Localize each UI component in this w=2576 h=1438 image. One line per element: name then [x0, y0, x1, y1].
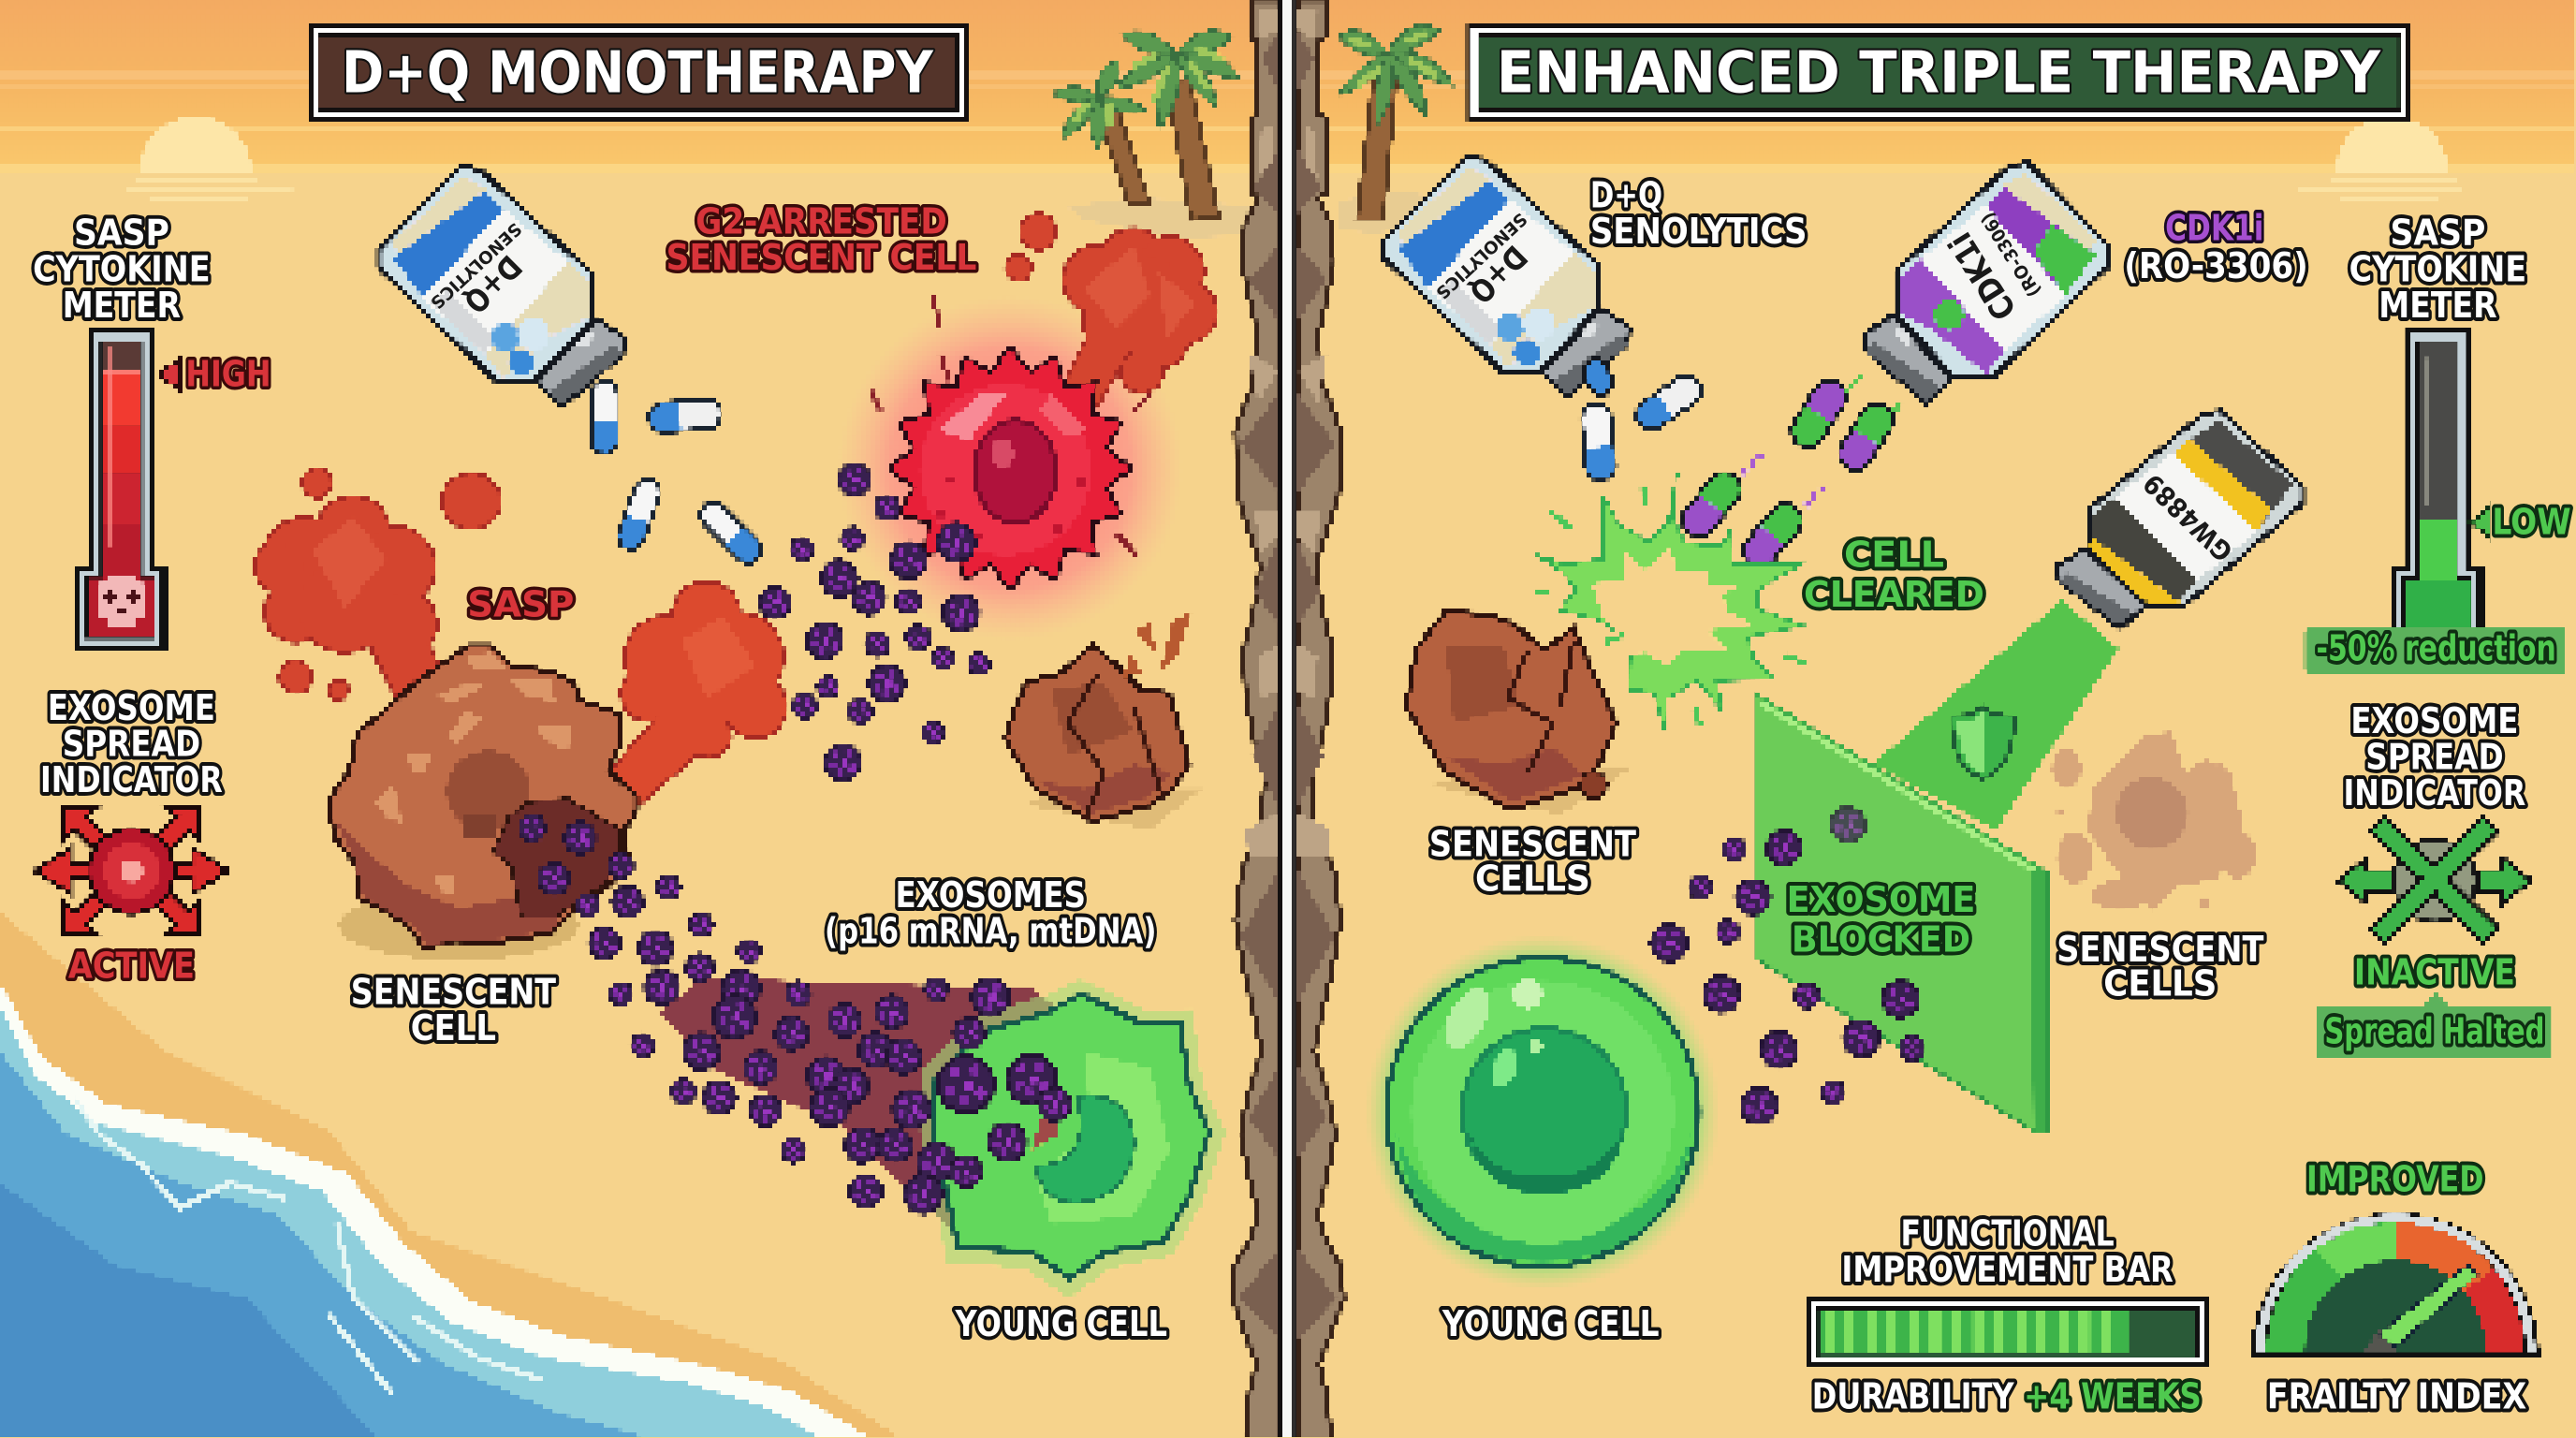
pills left [592, 381, 767, 568]
smoke right of cell [611, 583, 785, 808]
senescent cell rock [329, 646, 637, 961]
label: SASP cytokine meter left: SASP [74, 213, 169, 255]
label: exosome spread indicator left: EXOSOME [48, 687, 215, 729]
label: young cell left: YOUNG CELL [955, 1303, 1167, 1345]
CDK1i pills [1676, 374, 1902, 574]
label: exosome blocked: BLOCKED [1792, 918, 1970, 961]
label: G2-arrested senescent cell [666, 200, 976, 279]
sun left [128, 117, 292, 202]
label: durability [1812, 1375, 2202, 1417]
exosomes inside cell [518, 814, 597, 896]
bottle label CDK1i: (RO-3306) [1976, 209, 2045, 301]
label: exosome spread indicator left: INDICATOR [40, 759, 223, 801]
smoke top right [1005, 213, 1216, 431]
label: G2-arrested senescent cell: G2-ARRESTED [695, 200, 947, 242]
bottle label CDK1i: CDK1i [1941, 226, 2025, 327]
label: HIGH: HIGH [185, 354, 271, 396]
centre divider line [1278, 0, 1297, 1438]
SASP thermometer left [76, 329, 166, 649]
label: SASP: SASP [467, 583, 574, 625]
label: SASP cytokine meter left: METER [63, 285, 181, 327]
label: exosome spread indicator right: SPREAD [2365, 737, 2504, 779]
label: cell cleared: CELL [1844, 535, 1944, 577]
label: D+Q senolytics [1590, 174, 1807, 253]
label: senescent cells under rock: CELLS [1475, 858, 1590, 900]
label: SASP cytokine meter left: CYTOKINE [33, 248, 211, 290]
label: exosomes: EXOSOMES [895, 874, 1086, 917]
label: CDK1i [2124, 207, 2308, 287]
palm tree right [1339, 24, 1452, 233]
D+Q bottle right [1384, 155, 1630, 399]
label: ACTIVE: ACTIVE [68, 945, 195, 987]
label: exosome blocked [1787, 879, 1975, 961]
pills right blue [1580, 370, 1707, 481]
label: senescent cells under rock: SENESCENT [1429, 824, 1637, 866]
exosome blocking shield wall [1754, 694, 2047, 1132]
bottle label left: D+Q [457, 248, 529, 320]
red G2-arrested senescent cell [871, 296, 1149, 590]
icon: shield [1952, 707, 2014, 779]
heading: Enhanced Triple Therapy: ENHANCED TRIPLE THERAPY [1497, 40, 2381, 107]
label: exosomes: (p16 mRNA, mtDNA) [825, 911, 1157, 953]
label: exosome spread indicator right [2344, 700, 2525, 814]
label: SASP cytokine meter right [2349, 213, 2526, 327]
label: CDK1i: CDK1i [2165, 207, 2263, 249]
label: SASP cytokine meter right: SASP [2391, 213, 2485, 255]
exosome swarm [575, 852, 1073, 1215]
sky with sunset bands [0, 0, 2576, 172]
label: senescent cell [351, 972, 557, 1049]
functional improvement bar [1806, 1297, 2209, 1369]
label: cell cleared [1804, 535, 1984, 616]
label: exosome spread indicator left [40, 687, 223, 801]
label: functional improvement bar [1841, 1213, 2174, 1291]
label: frailty index: FRAILTY INDEX [2267, 1375, 2526, 1417]
frailty gauge [2250, 1212, 2539, 1358]
label: INACTIVE: INACTIVE [2354, 951, 2515, 993]
label: senescent cell: SENESCENT [351, 972, 557, 1014]
exosome indicator inactive icon [2337, 816, 2531, 943]
sun right [2296, 117, 2461, 202]
fractured rock right [1406, 611, 1630, 814]
young healthy cell [1365, 935, 1720, 1290]
label: functional improvement bar: IMPROVEMENT BAR [1841, 1249, 2174, 1291]
label: SASP cytokine meter right: METER [2378, 285, 2497, 327]
bottle label right D+Q: SENOLYTICS [1431, 209, 1530, 302]
young cell infected [920, 979, 1225, 1298]
icon: skull [98, 576, 144, 627]
title panel left [307, 23, 968, 122]
label: G2-arrested senescent cell: SENESCENT CELL [666, 237, 976, 279]
GW4889 bottle [2057, 411, 2303, 628]
spread halted badge [2317, 992, 2553, 1056]
red G2-arrested senescent cell glow [838, 296, 1183, 640]
blocked exosomes [1649, 806, 1926, 1125]
label: functional improvement bar: FUNCTIONAL [1901, 1213, 2115, 1255]
label: young cell right: YOUNG CELL [1442, 1303, 1660, 1345]
label: durability: DURABILITY [1812, 1375, 2014, 1417]
SASP thermometer right [2392, 329, 2482, 649]
rock divider right [1297, 0, 1344, 1438]
bottle label right D+Q: D+Q [1462, 238, 1534, 311]
label: D+Q senolytics: SENOLYTICS [1590, 211, 1808, 253]
label: CDK1i: (RO-3306) [2124, 245, 2308, 287]
label: SASP cytokine meter right: CYTOKINE [2349, 248, 2526, 290]
LOW arrow [2471, 506, 2491, 539]
label: improved: IMPROVED [2306, 1159, 2484, 1201]
label: exosomes [825, 874, 1157, 953]
label: senescent cells right [2056, 929, 2264, 1005]
smoke left [256, 468, 501, 740]
bottle label GW4889: GW4889 [2137, 468, 2239, 567]
GW4889 beam [1873, 600, 2119, 829]
label: cell cleared: CLEARED [1804, 574, 1984, 616]
palm trees left [1053, 31, 1273, 238]
bottle label left: SENOLYTICS [426, 218, 525, 313]
label: exosome spread indicator left: SPREAD [63, 724, 200, 766]
CDK1i bottle [1865, 162, 2110, 404]
rock divider left [1232, 0, 1278, 1438]
label: D+Q senolytics: D+Q [1590, 174, 1662, 216]
fractured senescent rock [1005, 611, 1203, 829]
label: durability: +4 WEEKS [2024, 1375, 2202, 1417]
label: senescent cells right: SENESCENT [2056, 929, 2264, 971]
label: senescent cells right: CELLS [2103, 963, 2217, 1005]
heading: D+Q Monotherapy: D+Q MONOTHERAPY [342, 40, 934, 107]
reduction badge [2305, 627, 2566, 674]
wet sand and ocean [0, 912, 900, 1438]
label: exosome spread indicator right: EXOSOME [2350, 700, 2518, 742]
label: SASP cytokine meter left [33, 213, 211, 327]
label: exosome blocked: EXOSOME [1787, 879, 1975, 921]
label: exosome spread indicator right: INDICATOR [2344, 772, 2525, 814]
label: senescent cell: CELL [411, 1007, 496, 1049]
green splash cell cleared [1533, 473, 1808, 728]
exosome stream top left panel [758, 462, 991, 783]
exosome spread indicator icon left [35, 807, 228, 935]
HIGH arrow [157, 359, 181, 391]
dissolved senescent cell [2052, 731, 2256, 912]
D+Q bottle left [379, 166, 624, 407]
title panel right [1467, 23, 2411, 122]
exosome trail [661, 977, 1064, 1229]
label: senescent cells under rock [1429, 824, 1637, 900]
